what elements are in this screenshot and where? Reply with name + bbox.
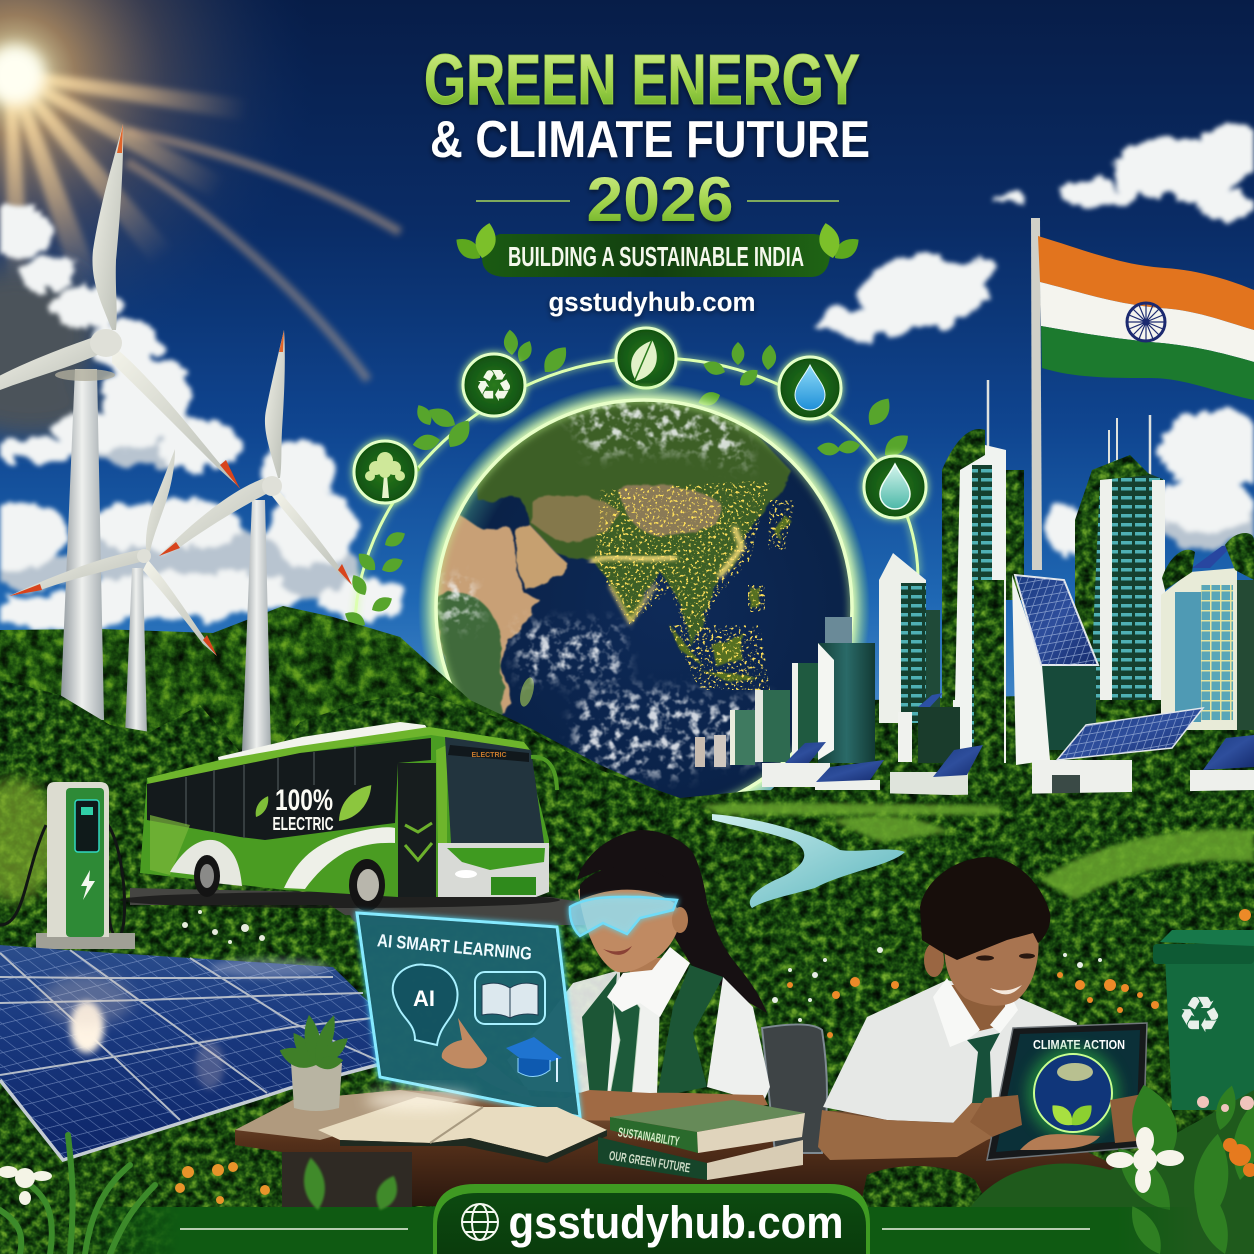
low buildings with solar roofs [762, 693, 1254, 804]
tower: right glass [1075, 415, 1165, 700]
tibet and central asia [620, 485, 722, 535]
globe [418, 382, 870, 834]
icon: teal drop [864, 456, 926, 518]
tablet title: CLIMATE ACTION [1033, 1037, 1125, 1052]
subtitle ribbon: BUILDING A SUSTAINABLE INDIA [508, 241, 804, 272]
recycling bin: ♻ [1178, 986, 1222, 1044]
collar [933, 978, 1018, 1047]
arabia [516, 525, 566, 590]
wind turbine: small [9, 449, 217, 735]
arm [818, 1097, 1020, 1160]
pillar [436, 745, 447, 843]
blurred foreground leaves [301, 1156, 403, 1214]
clouds [0, 124, 1254, 628]
white jasmine flower [1106, 1127, 1184, 1193]
tower: far right [1161, 533, 1254, 730]
grass lawns [700, 803, 1254, 900]
electric bus: ELECTRIC [472, 752, 506, 759]
icon: water drop [779, 357, 841, 419]
website text: gsstudyhub.com [548, 287, 756, 317]
icon: globe [462, 1204, 498, 1240]
roof [218, 722, 429, 768]
sun and rays [0, 0, 400, 400]
road [130, 888, 640, 925]
title: climate future: & CLIMATE FUTURE [430, 111, 870, 169]
neck [625, 958, 668, 1002]
title block [424, 41, 870, 317]
shirt [600, 1000, 660, 1097]
icon: tree [354, 441, 416, 503]
bus front [438, 843, 549, 897]
title: year 2026: 2026 [586, 165, 734, 235]
islands [670, 515, 790, 682]
icon: recycle: ♻ [474, 361, 514, 412]
shirt [823, 980, 1077, 1123]
book: sustainability [610, 1100, 805, 1153]
hologram book [475, 972, 545, 1024]
wind turbine: right [159, 330, 352, 752]
neck [950, 985, 1005, 1032]
ev charger [0, 782, 135, 949]
door [398, 763, 436, 897]
tablet earth [1020, 1047, 1119, 1150]
hair [920, 857, 1050, 960]
hologram brain: AI [413, 986, 435, 1011]
face [945, 925, 1039, 1006]
hologram brain [393, 965, 458, 1045]
hologram graduation cap [506, 1037, 562, 1082]
city lights [595, 480, 795, 690]
windshield [445, 737, 544, 843]
hologram title: AI SMART LEARNING [376, 930, 533, 964]
bus label [252, 779, 378, 834]
footer website: gsstudyhub.com [508, 1197, 844, 1248]
icon: leaf [616, 328, 676, 388]
tower: solar slant [1012, 575, 1098, 765]
ponytail and hair [577, 830, 767, 1013]
rear swoosh [150, 815, 190, 875]
far forest hill [0, 606, 760, 1000]
globe clouds [435, 395, 770, 775]
footer tab [433, 1184, 870, 1254]
potted plant [276, 1013, 353, 1111]
book: our green future [598, 1137, 803, 1180]
garden bushes with flowers [772, 909, 1251, 1038]
right forearm [543, 1090, 768, 1121]
green city [695, 218, 1254, 804]
far skyline [695, 617, 875, 767]
flag pole [1031, 218, 1042, 570]
tablet [987, 1023, 1147, 1160]
recycling bin [1153, 930, 1254, 1110]
shrubs below bus [135, 910, 370, 950]
left sleeve [507, 970, 620, 1095]
wind turbine: large [0, 124, 240, 720]
stacked books [598, 1100, 805, 1180]
vest [582, 965, 723, 1097]
icon: recycle [463, 354, 525, 416]
near ground foliage [0, 680, 1254, 1254]
foreground grass left [0, 1135, 403, 1254]
tower: white green wall [942, 380, 1024, 765]
foreground flowering plants right [860, 1079, 1254, 1254]
electric bus [120, 722, 560, 911]
pointing hand [442, 1018, 487, 1068]
subtitle ribbon [451, 221, 864, 277]
windows [147, 738, 431, 840]
raised arm [475, 1062, 530, 1097]
vine leaves on arc [342, 329, 913, 631]
madagascar [520, 677, 534, 707]
eco icon arc [342, 328, 926, 631]
body [140, 727, 549, 897]
tower: center [879, 553, 940, 723]
foreground leaves right of footer [1124, 1176, 1237, 1254]
open book [318, 1090, 607, 1163]
face [578, 874, 680, 972]
bus shadow [120, 892, 560, 908]
garden flowers below panel [175, 1162, 270, 1204]
bus label: ELECTRIC [272, 814, 334, 834]
smart goggles [570, 897, 677, 936]
girl student [475, 830, 770, 1121]
book: sustainability: SUSTAINABILITY [617, 1124, 681, 1149]
bus label: 100% [275, 784, 333, 817]
front swoosh [284, 827, 395, 889]
tie [967, 1033, 1000, 1103]
eurasia [470, 395, 790, 647]
africa [438, 514, 541, 714]
indian flag [1038, 236, 1254, 400]
river [712, 814, 905, 908]
desk [235, 1090, 1125, 1208]
title: green energy: GREEN ENERGY [424, 41, 860, 120]
tie [610, 997, 640, 1095]
collar [607, 947, 690, 1017]
footer banner [80, 1184, 1195, 1254]
foliage under solar panel [0, 1085, 300, 1254]
chair [762, 1024, 827, 1153]
hands [970, 1093, 1148, 1143]
cloud shadow [0, 265, 105, 439]
boy student [818, 857, 1148, 1160]
sunlit bush left [0, 778, 57, 902]
book: our green future: OUR GREEN FUTURE [608, 1148, 692, 1175]
bus wheels [194, 855, 385, 911]
solar panel array [0, 945, 377, 1160]
hologram panel [357, 913, 580, 1117]
city backing foliage [760, 690, 1254, 800]
